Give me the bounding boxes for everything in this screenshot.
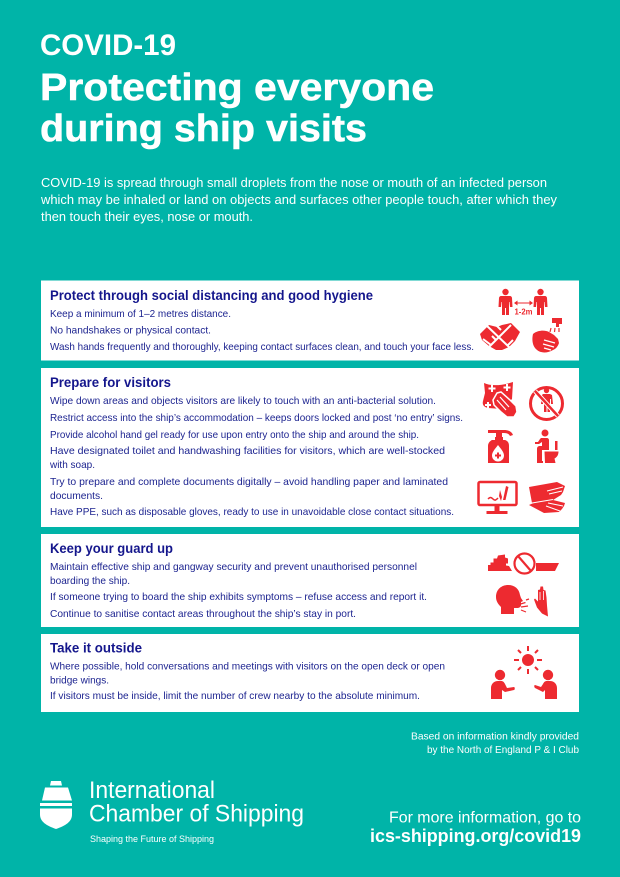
text: outside list: bridge wings.	[50, 676, 109, 686]
text: guard list: boarding the ship.	[50, 576, 130, 587]
text: outside list	[50, 662, 445, 702]
panel: prepare	[41, 368, 579, 527]
logo: International Chamber of Shipping: Chamber of Shipping	[89, 801, 304, 828]
text: prepare list	[49, 396, 463, 518]
credit text: Based on information kindly provided	[411, 730, 579, 742]
text: guard list: Maintain effective ship and gangway security and prevent unauthorised personnel	[50, 562, 417, 573]
title: Protecting everyone	[40, 67, 434, 109]
text: guard list	[50, 562, 427, 620]
intro paragraph: which may be inhaled or land on objects and surfaces other people touch, after which they	[40, 192, 557, 207]
credit text	[411, 730, 579, 756]
icon: digital documents	[478, 482, 516, 514]
icon: gloves	[529, 482, 565, 513]
icon: ship	[40, 781, 72, 829]
text: prepare list: documents.	[50, 491, 103, 502]
text: prepare list: Restrict access into the ship’s accommodation – keeps doors locked and post ‘no entry’ signs.	[50, 413, 463, 424]
title	[40, 29, 434, 150]
icon: distancing 1-2m: 1-2m	[514, 308, 532, 316]
text: guard list: If someone trying to board the ship exhibits symptoms – refuse access and report it.	[50, 592, 427, 603]
text: protect list: Keep a minimum of 1–2 metres distance.	[50, 309, 231, 320]
heading: outside: Take it outside	[50, 640, 142, 656]
text: protect list	[50, 309, 474, 353]
more information link	[370, 810, 581, 846]
logo: International Chamber of Shipping	[40, 777, 304, 845]
text: protect list: Wash hands frequently and thoroughly, keeping contact surfaces clean, and touch your face less.	[50, 342, 474, 353]
panel: protect	[41, 280, 579, 360]
panel: outside	[41, 634, 579, 712]
text: prepare list: Provide alcohol hand gel ready for use upon entry onto the ship and around the ship.	[50, 430, 419, 441]
text: prepare list: Try to prepare and complete documents digitally – avoid handling paper and laminated	[50, 477, 448, 488]
icon: no entry	[530, 388, 562, 420]
text: outside list: If visitors must be inside, limit the number of crew nearby to the absolute minimum.	[50, 691, 420, 702]
icon: washing hands	[532, 318, 562, 352]
icon: hand gel	[488, 430, 513, 463]
icon: wipe surfaces	[483, 382, 517, 417]
text: guard list: Continue to sanitise contact areas throughout the ship’s stay in port.	[50, 609, 356, 620]
heading: protect: Protect through social distancing and good hygiene	[50, 288, 373, 303]
icon: no boarding ship	[488, 554, 559, 574]
title: COVID-19	[40, 29, 176, 62]
logo: International Chamber of Shipping: International	[89, 777, 215, 804]
icon: sun and two people	[491, 646, 557, 699]
more information link: For more information, go to	[389, 810, 581, 826]
text: prepare list: Have designated toilet and handwashing facilities for visitors, which are well-stocked	[50, 446, 445, 457]
icon: coughing head	[496, 585, 529, 614]
text: prepare list: with soap.	[49, 460, 95, 471]
text: protect list: No handshakes or physical contact.	[50, 326, 211, 336]
text: outside list: Where possible, hold conversations and meetings with visitors on the open deck or open	[50, 662, 445, 672]
icon: no handshake	[480, 323, 520, 350]
heading: prepare: Prepare for visitors	[50, 375, 171, 390]
logo: International Chamber of Shipping: Shaping the Future of Shipping	[90, 834, 214, 845]
intro paragraph	[40, 175, 557, 224]
title: during ship visits	[40, 108, 367, 150]
text: prepare list: Have PPE, such as disposable gloves, ready to use in unavoidable close contact situations.	[50, 507, 454, 518]
heading: guard: Keep your guard up	[50, 541, 173, 556]
credit text: by the North of England P & I Club	[427, 744, 579, 756]
more information link: ics-shipping.org/covid19	[370, 826, 581, 846]
icon: distancing 1-2m	[498, 289, 548, 316]
icon: toilet	[535, 430, 558, 463]
intro paragraph: then touch their eyes, nose or mouth.	[41, 209, 253, 224]
text: prepare list: Wipe down areas and objects visitors are likely to touch with an anti-bacterial solution.	[50, 396, 436, 407]
icon: stop hand	[534, 586, 548, 616]
intro paragraph: COVID-19 is spread through small droplets from the nose or mouth of an infected person	[41, 175, 547, 190]
panel: guard	[41, 534, 579, 627]
